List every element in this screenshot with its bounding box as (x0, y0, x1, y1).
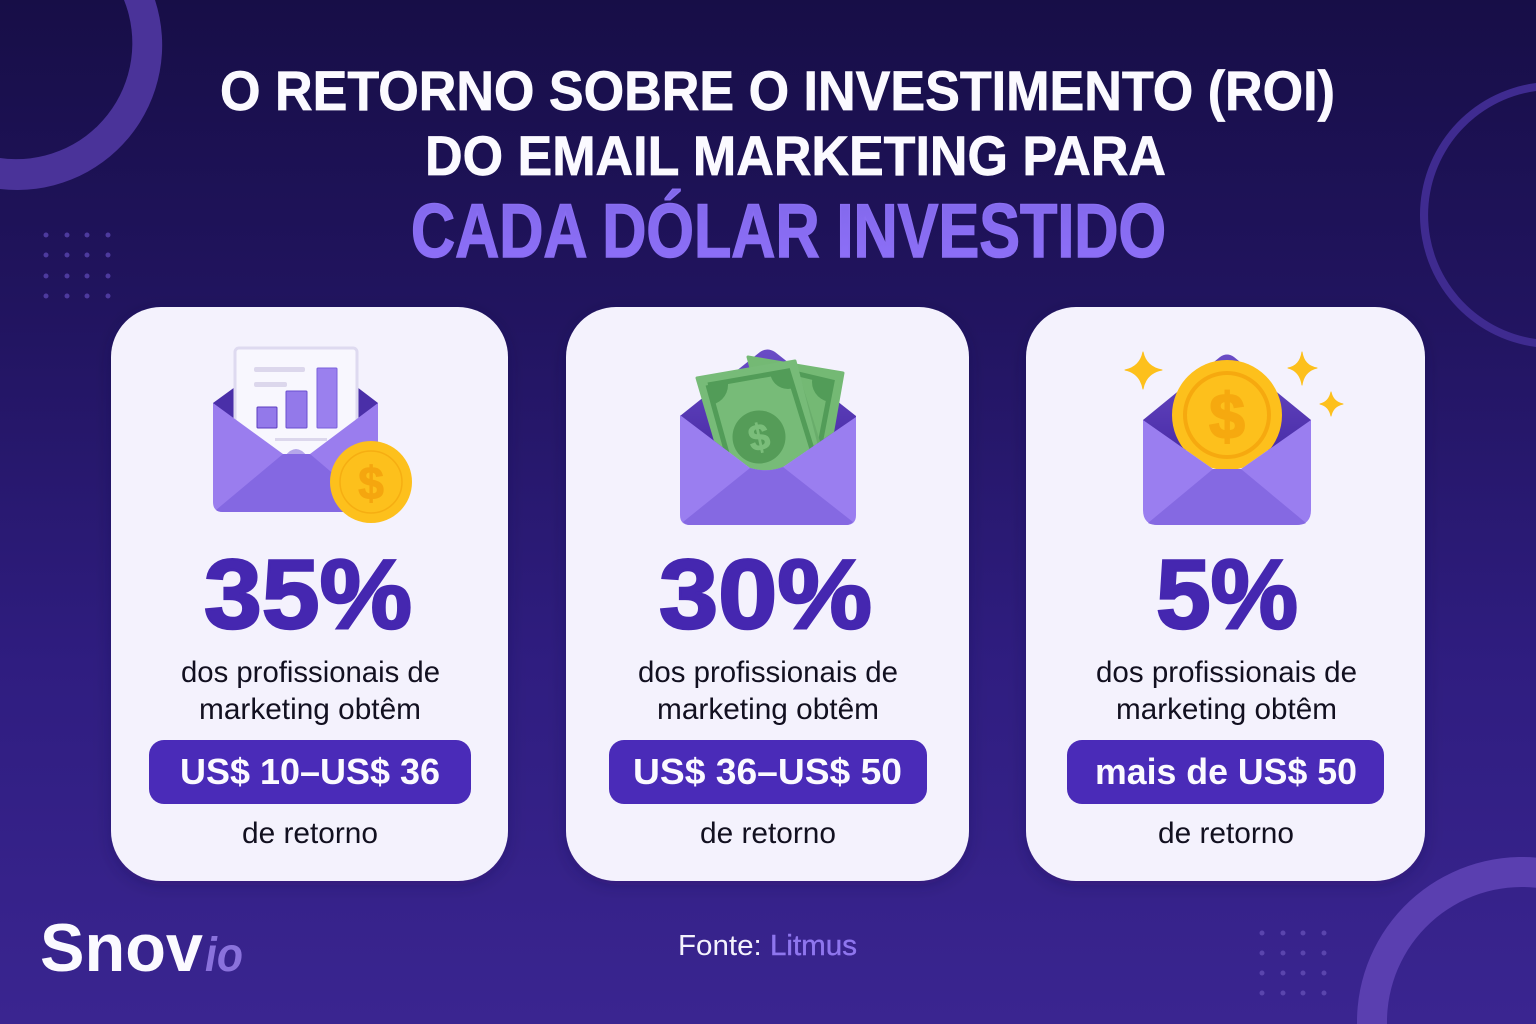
pill: range: US$ 36–US$ 50 (633, 751, 902, 792)
stat: 30%: 30% (659, 539, 872, 649)
back bill (748, 357, 843, 475)
icon: envelope with banknotes (680, 350, 856, 525)
icon: envelope with banknotes: $ (745, 415, 774, 460)
text: description: dos profissionais de (181, 656, 440, 689)
pill: range: US$ 10–US$ 36 (180, 751, 440, 792)
text: de retorno: de retorno (1158, 817, 1294, 850)
panel: card 5% (1026, 307, 1425, 881)
text: de retorno: de retorno (700, 817, 836, 850)
front bill (718, 392, 820, 470)
pill: range (149, 740, 471, 804)
icon: envelope with coin and sparkles: $ (1209, 380, 1245, 452)
pill: range (1067, 740, 1384, 804)
icon: envelope with chart and coin (213, 348, 412, 523)
text: description: marketing obtêm (1116, 693, 1337, 726)
source line: Fonte: Litmus (678, 930, 857, 962)
pill: range: mais de US$ 50 (1095, 751, 1357, 792)
title line 1: O RETORNO SOBRE O INVESTIMENTO (ROI) (220, 59, 1335, 122)
stat: 5%: 5% (1156, 539, 1298, 649)
logo: Snovio: Snov (40, 910, 203, 986)
dot grid: top left (44, 232, 110, 298)
decorative ring: bottom right (1357, 857, 1536, 1024)
text: description (1096, 656, 1357, 726)
text: description: dos profissionais de (638, 656, 898, 689)
text: description: marketing obtêm (657, 693, 879, 726)
dot grid: bottom right (1260, 930, 1326, 996)
panel: card 35% (111, 307, 508, 881)
title (220, 59, 1335, 274)
decorative ring: top left (0, 0, 162, 190)
text: description (181, 656, 440, 726)
logo: Snovio: io (205, 929, 243, 982)
title line 2: DO EMAIL MARKETING PARA (425, 124, 1166, 187)
text: de retorno: de retorno (242, 817, 378, 850)
pill: range (609, 740, 927, 804)
decorative ring: right (1420, 83, 1536, 347)
text: description: marketing obtêm (199, 693, 421, 726)
stat: 35%: 35% (204, 539, 412, 649)
icon: envelope with coin and sparkles (1125, 352, 1343, 525)
panel: card 30% (566, 307, 969, 881)
icon: envelope with chart and coin: $ (358, 457, 384, 509)
text: description (638, 656, 898, 726)
text: description: dos profissionais de (1096, 656, 1357, 689)
title highlight line: CADA DÓLAR INVESTIDO (411, 189, 1166, 274)
